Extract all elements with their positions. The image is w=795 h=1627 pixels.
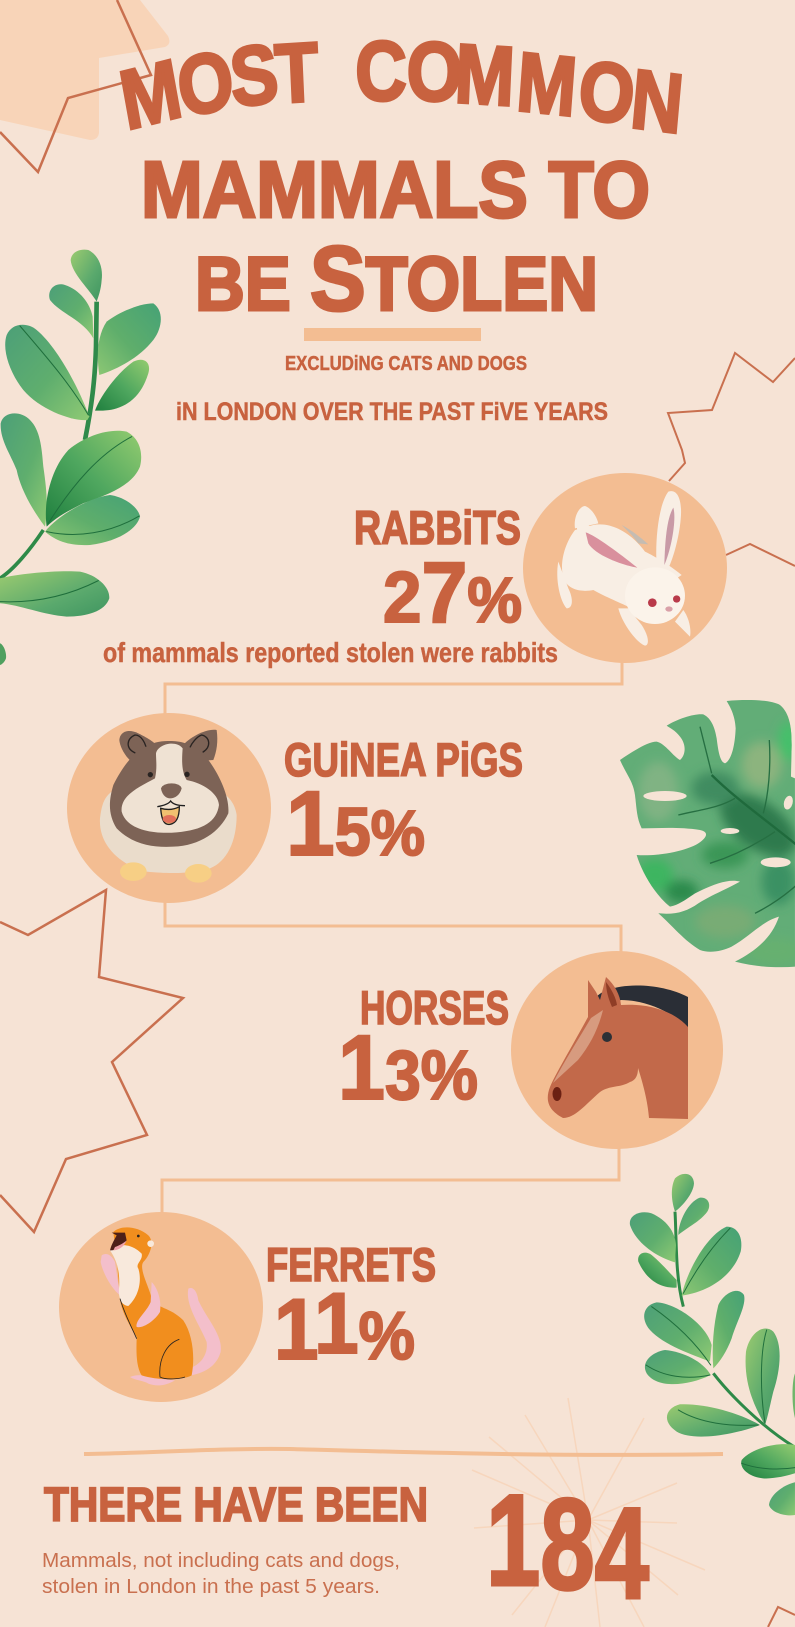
rabbits note: of mammals reported stolen were rabbits bbox=[103, 637, 558, 668]
total heading: THERE HAVE BEEN bbox=[44, 1479, 428, 1532]
panel: ferrets bbox=[59, 1212, 436, 1402]
ferrets value: 1 bbox=[314, 1276, 359, 1372]
total value: 4 bbox=[595, 1480, 649, 1626]
icon: ferret bbox=[101, 1227, 221, 1385]
guinea pigs circle bbox=[67, 713, 271, 903]
total value: 8 bbox=[540, 1471, 595, 1617]
horses label: HORSES bbox=[360, 981, 509, 1034]
title line 3: BE STOLEN bbox=[195, 228, 598, 330]
icon: rabbit bbox=[557, 491, 690, 646]
icon: horse bbox=[548, 977, 688, 1119]
title line 1: MOST COMMON bbox=[113, 23, 687, 152]
burst rays behind total bbox=[472, 1398, 705, 1627]
subtitle: excluding: EXCLUDiNG CATS AND DOGS bbox=[285, 353, 527, 375]
rabbits value: 27% bbox=[383, 545, 522, 641]
decorative blob: top-left bbox=[0, 0, 169, 140]
monstera leaf bbox=[615, 695, 795, 975]
total description: stolen in London in the past 5 years. bbox=[42, 1576, 380, 1598]
panel: horses bbox=[338, 951, 723, 1149]
panel: guinea pigs bbox=[67, 713, 523, 903]
rabbits label: RABBiTS bbox=[354, 501, 521, 554]
icon: guinea pig bbox=[100, 730, 237, 883]
star outline: left bbox=[0, 890, 183, 1232]
ferrets value: 1 bbox=[274, 1282, 317, 1378]
title line 2: MAMMALS TO bbox=[141, 145, 650, 234]
subtitle: location and period: iN LONDON OVER THE PAST FiVE YEARS bbox=[176, 398, 608, 426]
horses value: 13% bbox=[338, 1017, 478, 1119]
total value: 1 bbox=[486, 1467, 558, 1613]
panel: rabbits bbox=[103, 473, 727, 668]
title underline bar bbox=[304, 328, 481, 341]
ferrets label: FERRETS bbox=[266, 1238, 436, 1291]
right leaf branch bbox=[630, 1174, 795, 1515]
star outline: top-left bbox=[0, 0, 151, 172]
guinea pigs value: 15% bbox=[286, 773, 425, 875]
ferrets value: % bbox=[359, 1298, 415, 1374]
star outline: bottom-right corner bbox=[768, 1607, 795, 1627]
title bbox=[113, 23, 687, 330]
divider line bbox=[84, 1449, 723, 1455]
guinea pigs label: GUiNEA PiGS bbox=[284, 733, 523, 786]
left leaf branch bbox=[0, 250, 161, 665]
total description bbox=[42, 1550, 400, 1598]
rabbits circle bbox=[523, 473, 727, 663]
connector lines bbox=[162, 660, 622, 1214]
horses circle bbox=[511, 951, 723, 1149]
total description: Mammals, not including cats and dogs, bbox=[42, 1550, 400, 1572]
star outline: right bbox=[668, 353, 795, 566]
ferrets circle bbox=[59, 1212, 263, 1402]
